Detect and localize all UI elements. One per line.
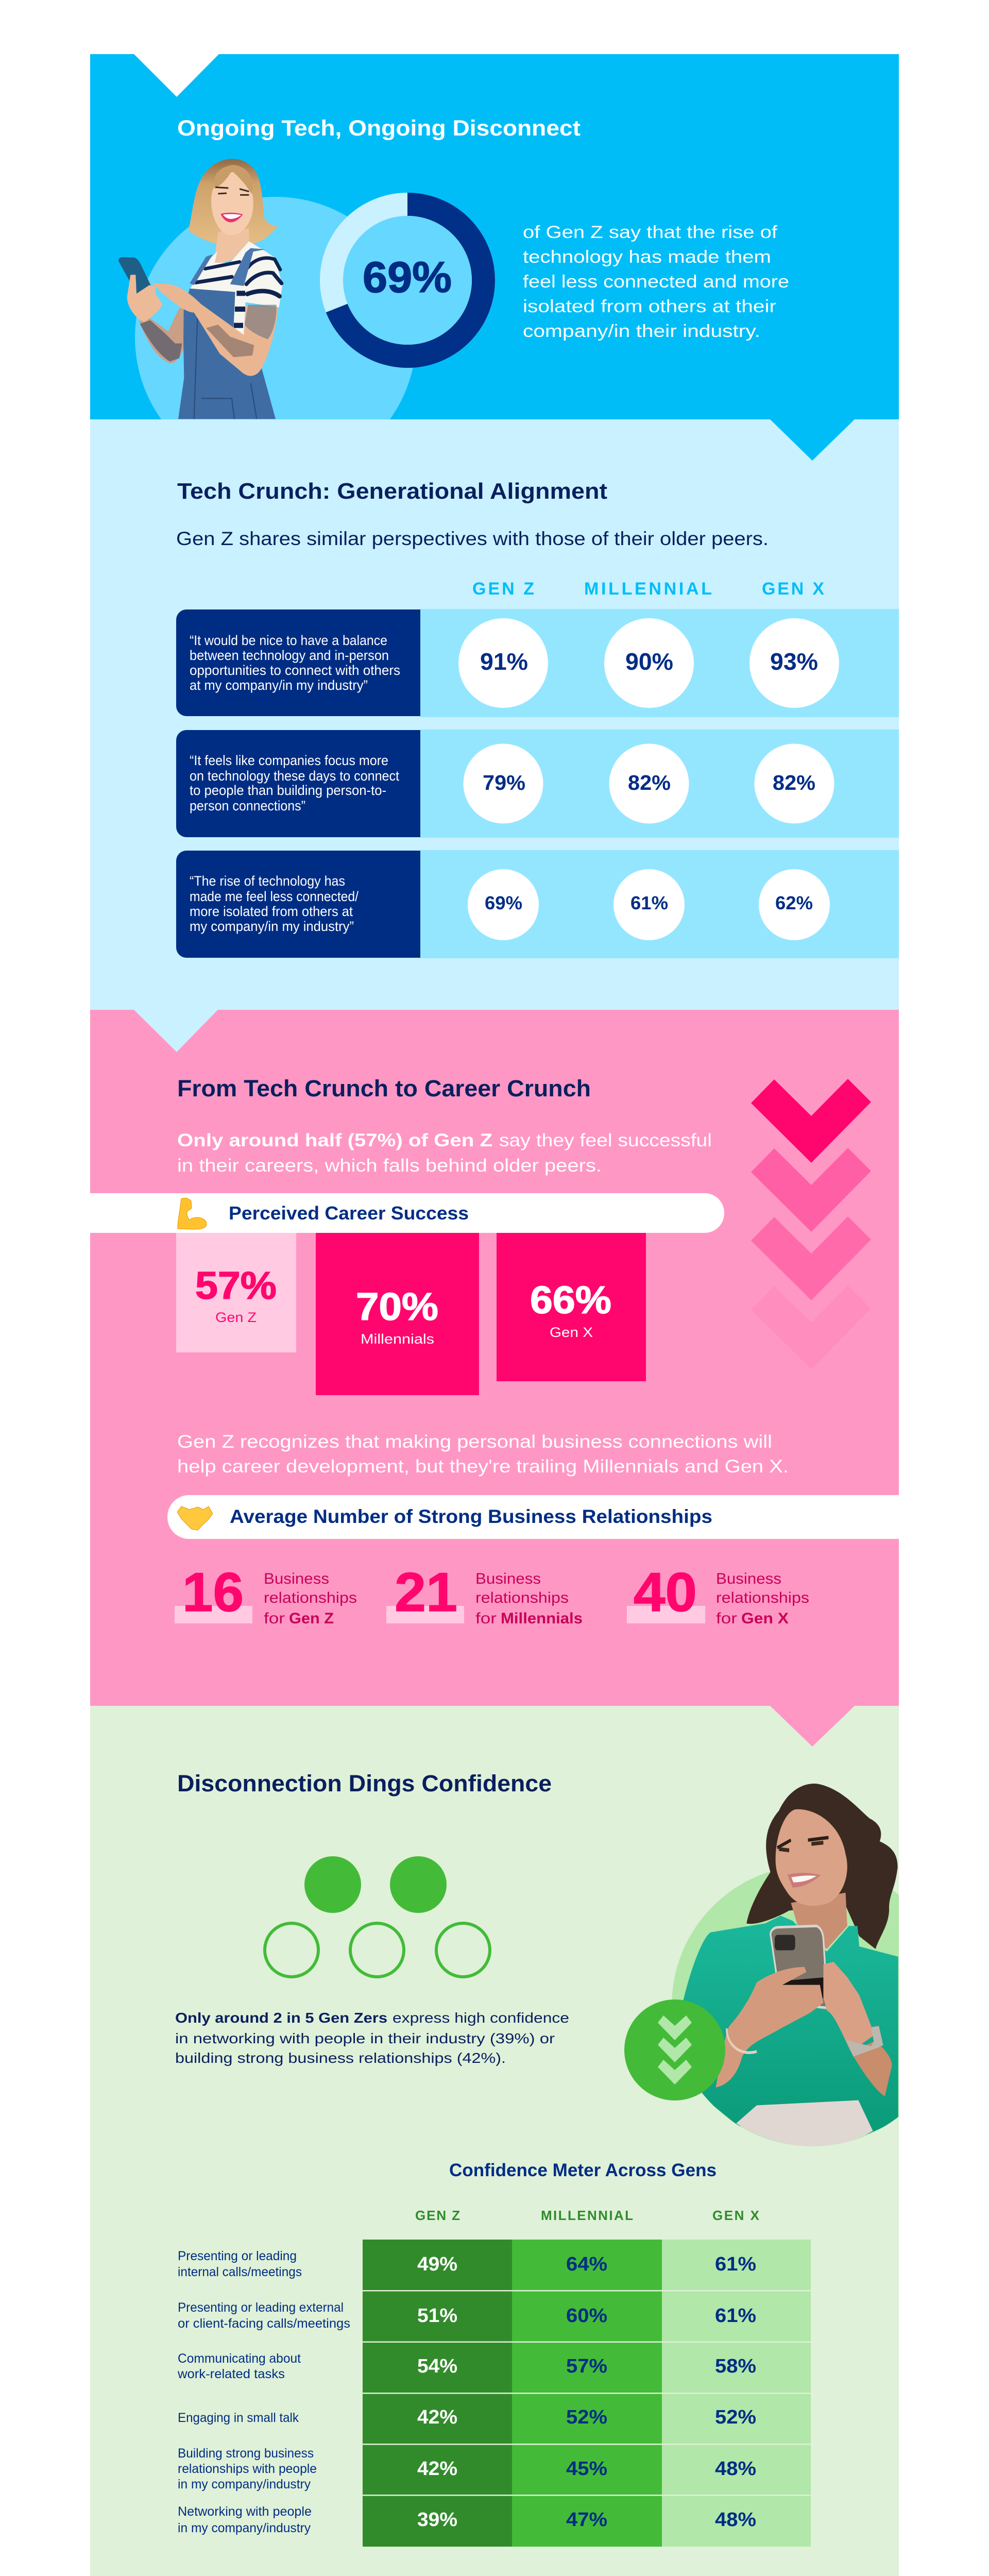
donut chart: 69%: [320, 193, 495, 368]
section: disconnection dings confidence: [90, 1706, 953, 2576]
text: gen z recognizes: help career development, but they're trailing Millennials and Gen X.: [177, 1456, 789, 1477]
row 1: opportunities to connect with others: [190, 663, 400, 678]
millennial values: [566, 2253, 607, 2531]
text: 2 in 5 gen zers: [175, 2010, 569, 2066]
text: only around half: in their careers, which falls behind older peers.: [177, 1156, 602, 1176]
gen x values: 52%: [715, 2406, 756, 2428]
row 3: my company/in my industry”: [190, 919, 354, 934]
stat: 40 gen x: relationships: [716, 1589, 809, 1606]
stat: 40 gen x: for: [716, 1610, 737, 1627]
text: 2 in 5 gen zers: building strong business relationships (42%).: [175, 2050, 506, 2066]
text: 2 in 5 gen zers: in networking with people in their industry (39%) or: [175, 2030, 555, 2046]
row 3: 62%: [775, 892, 813, 913]
stat: 16 gen z: Gen Z: [289, 1610, 334, 1627]
text: gen z recognizes: [177, 1432, 789, 1477]
table row labels: relationships with people: [178, 2462, 317, 2476]
bar: millennials 70%: [316, 1233, 479, 1395]
chevron arrows: [751, 1079, 871, 1369]
table row labels: Communicating about: [178, 2351, 301, 2366]
bar: millennials 70%: Millennials: [361, 1331, 434, 1347]
banner: perceived career success: Perceived Career Success: [229, 1202, 469, 1224]
millennial values: 47%: [566, 2509, 607, 2531]
stat: 16 gen z: Business: [264, 1570, 329, 1587]
gen z values: 54%: [417, 2355, 457, 2377]
gen z values: 42%: [417, 2406, 457, 2428]
stat: 16 gen z: for: [264, 1610, 285, 1627]
table column headers: GEN Z: [415, 2208, 460, 2223]
column headers: GEN Z: [472, 579, 534, 599]
badge: down chevrons: [624, 1999, 725, 2100]
donut chart: 69%: 69%: [363, 253, 452, 301]
banner: business relationships: Average Number of Strong Business Relationships: [230, 1506, 712, 1527]
gen x values: 61%: [715, 2253, 756, 2275]
heading: career crunch: From Tech Crunch to Career Crunch: [177, 1075, 591, 1101]
heading: tech crunch: Tech Crunch: Generational Alignment: [177, 479, 607, 504]
column headers: GEN X: [762, 579, 824, 599]
row 1: [176, 609, 899, 717]
gen x values: 48%: [715, 2509, 756, 2531]
table: confidence meter: [177, 2160, 811, 2547]
text: only around half: [177, 1130, 712, 1176]
table row labels: work-related tasks: [177, 2367, 285, 2381]
stat: 21 millennials: Business: [475, 1570, 541, 1587]
stat: 16 gen z: relationships: [264, 1589, 357, 1606]
millennial values: 64%: [566, 2253, 607, 2275]
row 2: 82%: [628, 771, 671, 794]
row 2: [176, 730, 899, 838]
text: 69% description: of Gen Z say that the rise of: [523, 223, 778, 242]
millennial values: 57%: [566, 2355, 607, 2377]
millennial values: 52%: [566, 2406, 607, 2428]
icon: flexed bicep: [178, 1198, 207, 1229]
row 3: “The rise of technology has: [190, 873, 345, 889]
text: 69% description: technology has made them: [523, 247, 771, 267]
bar: millennials 70%: 70%: [356, 1285, 438, 1328]
heading: ongoing tech: Ongoing Tech, Ongoing Disconnect: [177, 116, 581, 141]
bar: gen x 66%: Gen X: [550, 1325, 593, 1340]
bar: gen x 66%: 66%: [530, 1278, 611, 1321]
table row labels: in my company/industry: [178, 2521, 311, 2535]
text: 2 in 5 gen zers: express high confidence: [393, 2010, 569, 2026]
icon: handshake: [177, 1506, 213, 1530]
photo: woman in green shirt: [684, 1784, 898, 2147]
table row labels: [177, 2249, 350, 2535]
gen x values: 58%: [715, 2355, 756, 2377]
stat: 21 millennials: [386, 1561, 583, 1627]
table column headers: [415, 2208, 760, 2223]
row 1: between technology and in-person: [190, 648, 389, 663]
table row labels: or client-facing calls/meetings: [178, 2316, 350, 2331]
photo: woman with phone: [118, 159, 282, 419]
stat: 40 gen x: Business: [716, 1570, 781, 1587]
row 2: on technology these days to connect: [190, 768, 399, 784]
stat: 16 gen z: 16: [182, 1561, 244, 1623]
text: 69% description: feel less connected and more: [523, 272, 789, 292]
millennial values: 60%: [566, 2305, 607, 2327]
text: 69% description: [523, 223, 789, 341]
table columns: [363, 2240, 811, 2547]
bar: gen z 57%: Gen Z: [215, 1310, 257, 1325]
text: 69% description: isolated from others at their: [523, 297, 776, 316]
table row labels: Presenting or leading external: [178, 2300, 344, 2315]
row 3: made me feel less connected/: [190, 889, 359, 904]
text: 2 in 5 gen zers: Only around 2 in 5 Gen Zers: [175, 2010, 387, 2026]
table row labels: internal calls/meetings: [178, 2265, 302, 2279]
row 2: “It feels like companies focus more: [190, 753, 388, 768]
bar: gen z 57%: 57%: [195, 1264, 277, 1307]
row 2: person connections”: [190, 798, 305, 814]
row 3: 61%: [630, 892, 668, 913]
text: gen z recognizes: Gen Z recognizes that making personal business connections will: [177, 1432, 772, 1452]
gen z values: 39%: [417, 2509, 457, 2531]
row 1: at my company/in my industry”: [190, 677, 368, 693]
row 1: 91%: [480, 648, 528, 675]
stat: 21 millennials: relationships: [475, 1589, 569, 1606]
column headers: MILLENNIAL: [584, 579, 712, 599]
heading: disconnection: Disconnection Dings Confidence: [177, 1770, 552, 1797]
table row labels: Presenting or leading: [178, 2249, 297, 2263]
table title: Confidence Meter Across Gens: [449, 2160, 717, 2180]
gen x values: 61%: [715, 2305, 756, 2327]
stat: 21 millennials: Millennials: [501, 1610, 583, 1627]
gen x values: 48%: [715, 2458, 756, 2480]
table row labels: Building strong business: [178, 2446, 314, 2461]
text: only around half: say they feel successful: [499, 1130, 712, 1150]
gen z values: 51%: [417, 2305, 457, 2327]
table row labels: Networking with people: [178, 2504, 312, 2519]
text: 69% description: company/in their industry.: [523, 321, 760, 341]
section: ongoing tech: [90, 54, 899, 419]
row 1: 90%: [625, 648, 673, 675]
millennial values: 45%: [566, 2458, 607, 2480]
backdrop circle behind woman: [672, 1871, 899, 2146]
stat: 21 millennials: for: [475, 1610, 497, 1627]
bar: gen x 66%: [497, 1233, 646, 1381]
stat: 21 millennials: 21: [395, 1561, 457, 1623]
backdrop circle behind woman: [135, 197, 413, 419]
section: career crunch: [90, 1010, 899, 1706]
table row labels: in my company/industry: [178, 2477, 311, 2492]
text: only around half: Only around half (57%) of Gen Z: [177, 1130, 492, 1150]
gen x values: [715, 2253, 756, 2531]
gen z values: 49%: [417, 2253, 457, 2275]
table column headers: GEN X: [712, 2208, 760, 2223]
table row labels: Engaging in small talk: [178, 2411, 299, 2425]
row 3: [176, 850, 899, 958]
gen z values: [417, 2253, 457, 2531]
row 1: “It would be nice to have a balance: [190, 633, 387, 648]
stat: 40 gen x: [627, 1561, 809, 1627]
row 2: to people than building person-to-: [190, 783, 386, 798]
stat: 40 gen x: Gen X: [741, 1610, 789, 1627]
bar: gen z 57%: [176, 1233, 296, 1352]
stat: 16 gen z: [175, 1561, 357, 1627]
row 2: 79%: [483, 771, 525, 794]
table column headers: MILLENNIAL: [541, 2208, 633, 2223]
gen z values: 42%: [417, 2458, 457, 2480]
stat: 40 gen x: 40: [634, 1561, 697, 1623]
row 1: 93%: [770, 648, 818, 675]
subtitle: Gen Z shares similar perspectives with those of their older peers.: [176, 528, 769, 549]
row 3: more isolated from others at: [190, 904, 353, 919]
section: tech crunch: [90, 419, 899, 1010]
icon row: 2 in 5 dots: [265, 1856, 490, 1977]
banner: perceived career success: [90, 1193, 724, 1233]
row 3: 69%: [485, 892, 522, 913]
column headers: [472, 579, 824, 599]
banner: business relationships: [167, 1495, 899, 1539]
row 2: 82%: [773, 771, 815, 794]
